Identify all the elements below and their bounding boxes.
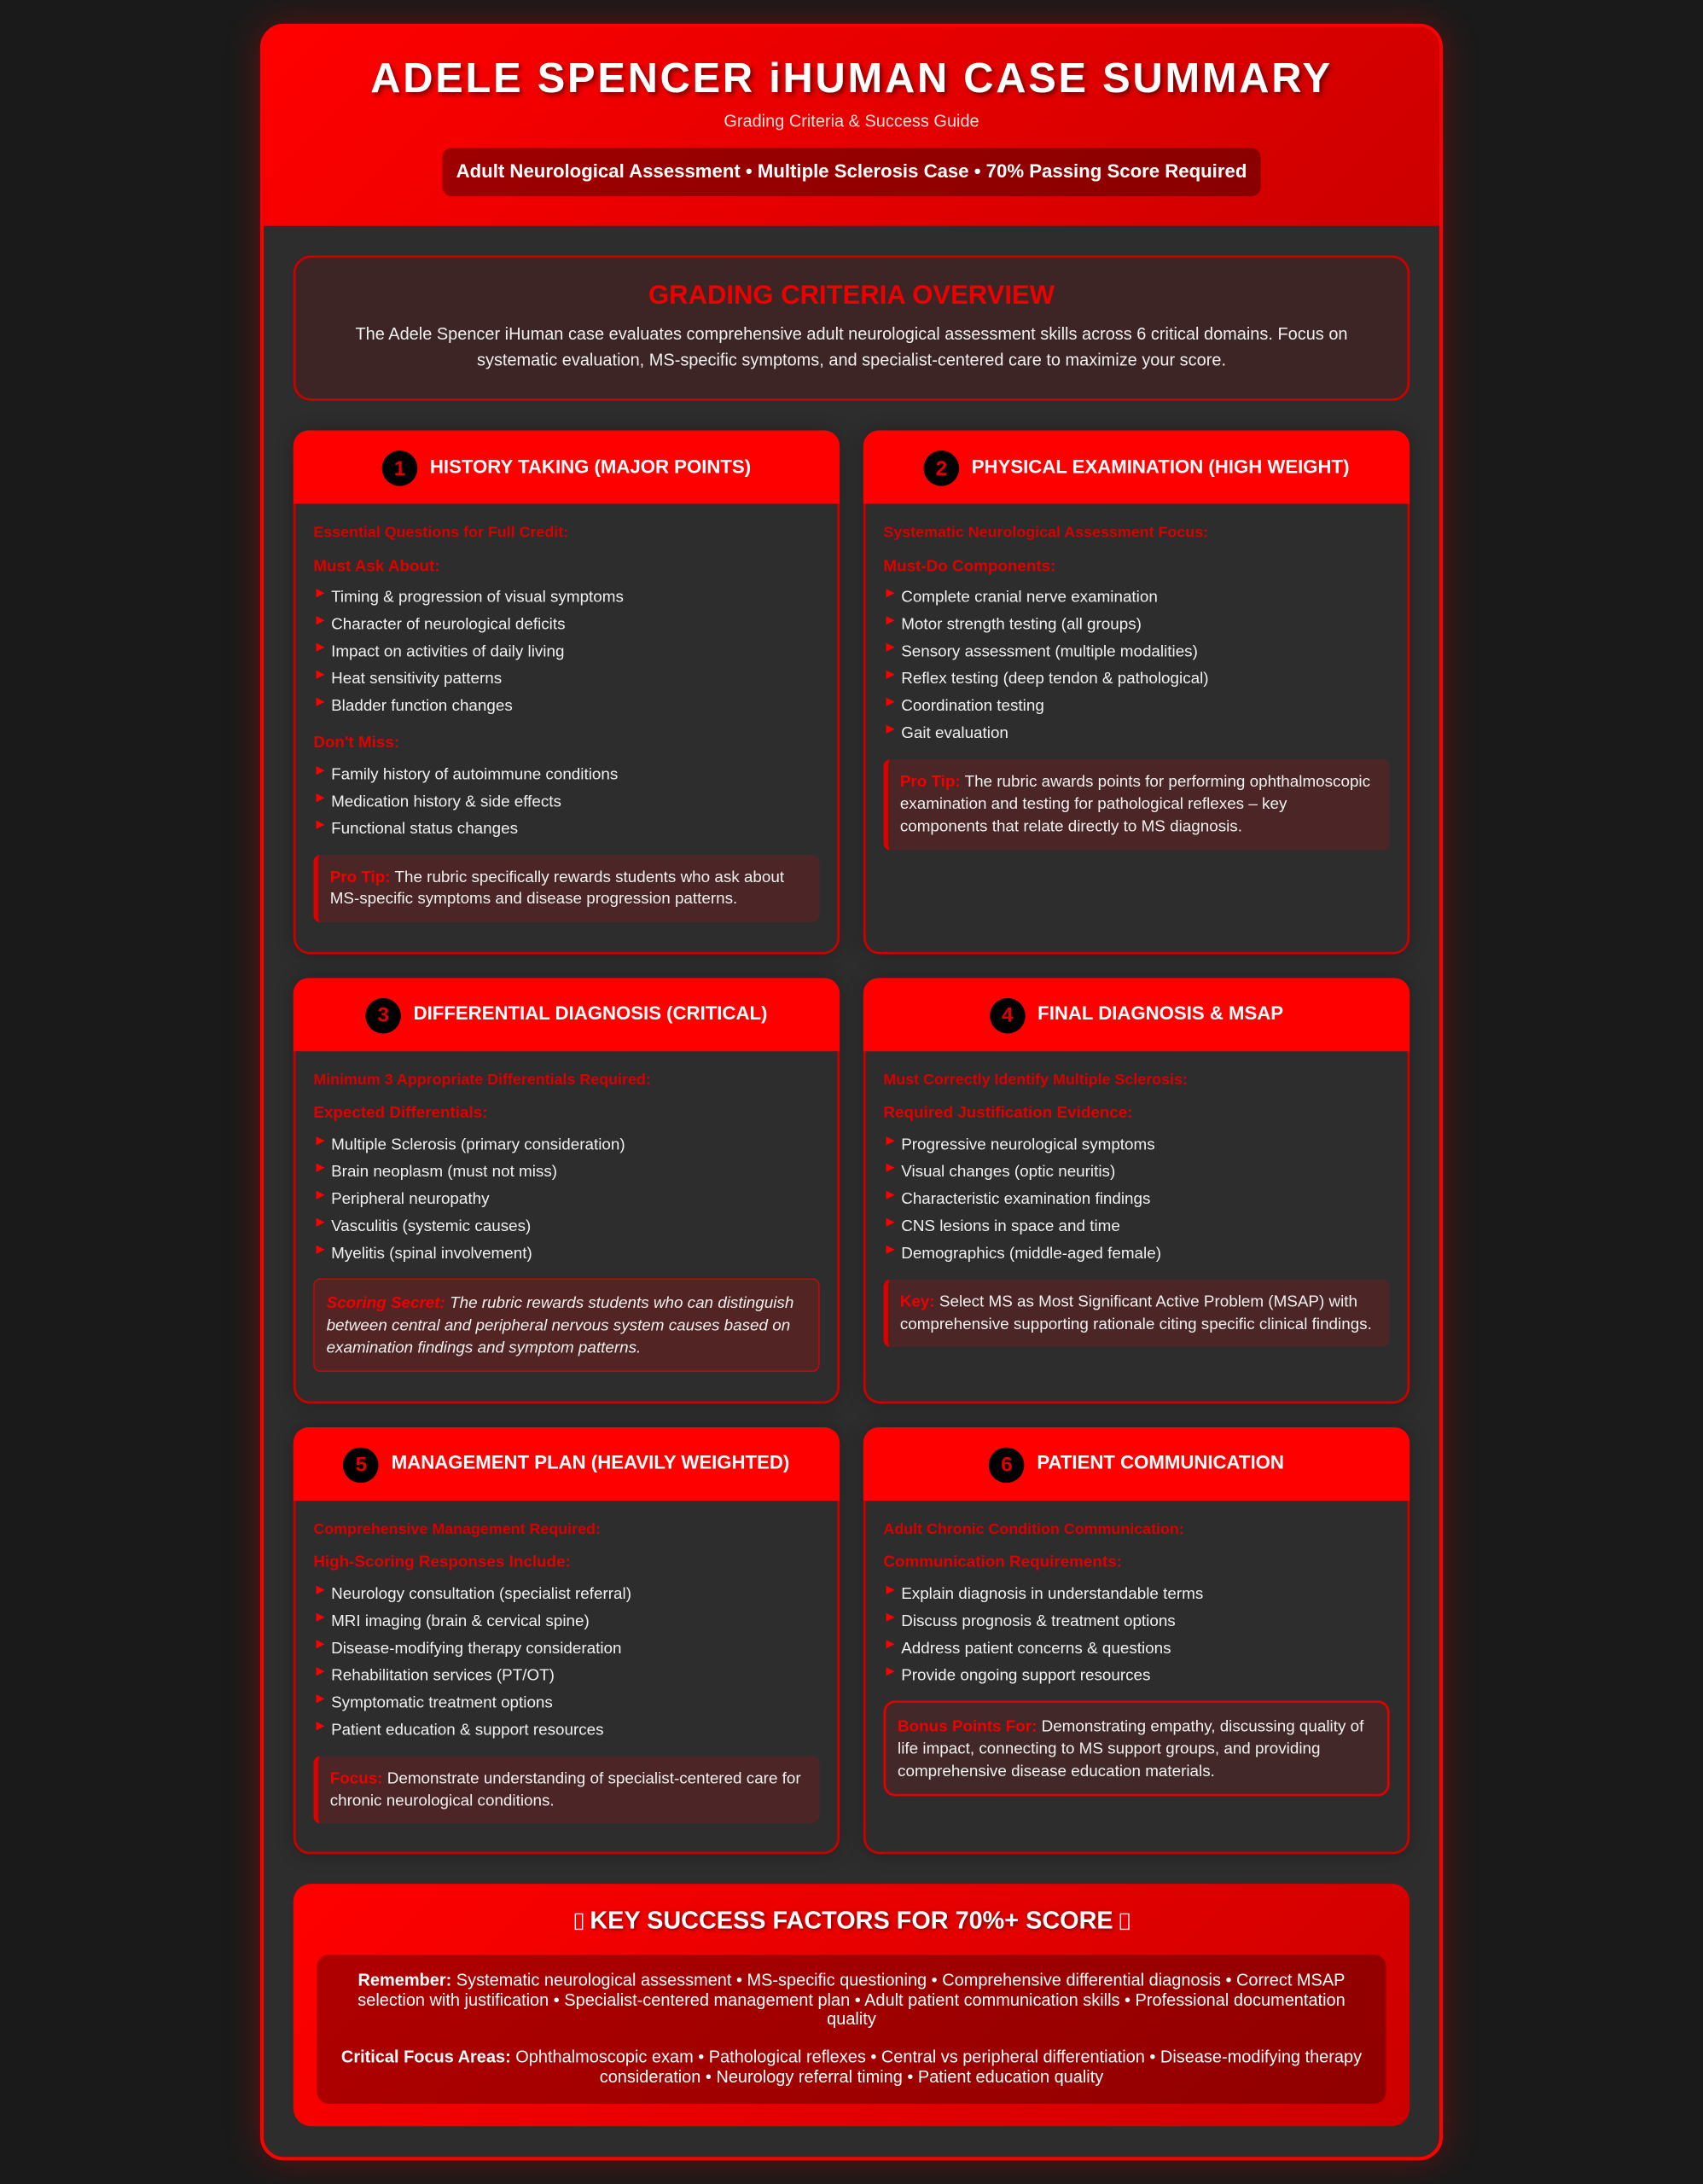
sub heading: Required Justification Evidence: [883,1103,1133,1121]
checklist: Multiple Sclerosis (primary consideration) [331,1135,625,1153]
checklist: Vasculitis (systemic causes) [331,1217,531,1234]
checklist: Disease-modifying therapy consideration [331,1639,622,1656]
case info badge: Adult Neurological Assessment • Multiple Sclerosis Case • 70% Passing Score Required [456,162,1247,182]
success details: Remember: Systematic neurological assessment • MS-specific questioning • Comprehensive differential diagnosis • Correct MSAP selection with justification • Specialist-centered management plan • Adult patient communication skills • Professional documentation quality [357,1972,1346,2029]
checklist: Patient education & support resources [331,1720,604,1738]
section title: Must Correctly Identify Multiple Sclerosis: [883,1070,1188,1088]
callout: pro tip: Pro Tip: The rubric specifically rewards students who ask about MS-specific symptoms and disease progression patterns. [330,868,784,908]
checklist: Provide ongoing support resources [901,1665,1150,1683]
card heading 5: 5 [356,1452,367,1476]
checklist [886,1584,1203,1684]
callout: bonus points: Bonus Points For: Demonstrating empathy, discussing quality of life impact, connecting to MS support groups, and providing comprehensive disease education materials. [898,1717,1363,1780]
checklist [316,764,618,837]
callout: scoring secret [313,1279,820,1372]
checklist: CNS lesions in space and time [901,1217,1120,1234]
card heading 4 [863,978,1409,1051]
card heading 1: 1 [394,456,405,479]
sub heading: High-Scoring Responses Include: [313,1553,571,1571]
checklist: Impact on activities of daily living [331,642,564,659]
checklist: Bladder function changes [331,696,513,714]
checklist: Family history of autoimmune conditions [331,764,618,782]
checklist: Timing & progression of visual symptoms [331,588,624,606]
panel: grading criteria overview [294,255,1409,401]
card body 3 [313,1070,820,1372]
infographic container [260,24,1443,2160]
card heading 6 [863,1426,1409,1500]
checklist: Brain neoplasm (must not miss) [331,1162,557,1180]
card heading 5 [294,1426,840,1500]
checklist: Rehabilitation services (PT/OT) [331,1665,555,1683]
callout: pro tip: Pro Tip: The rubric awards points for performing ophthalmoscopic examination and testing for pathological reflexes – key components that relate directly to MS diagnosis. [900,772,1370,834]
panel: final diagnosis [863,978,1409,1403]
sub heading: Expected Differentials: [313,1103,488,1121]
card body 4 [883,1070,1390,1347]
checklist: Symptomatic treatment options [331,1693,553,1711]
checklist: Complete cranial nerve examination [901,588,1158,606]
panel: differential diagnosis [294,978,840,1403]
sub heading: Must Ask About: [313,556,440,574]
card heading 1 [294,431,840,503]
checklist [316,1135,625,1262]
card heading 1: HISTORY TAKING (MAJOR POINTS) [430,457,751,477]
checklist: Explain diagnosis in understandable terms [901,1584,1203,1602]
card heading 4: 4 [1002,1003,1014,1026]
section title: Essential Questions for Full Credit: [313,523,568,540]
checklist: Character of neurological deficits [331,615,566,633]
checklist: Motor strength testing (all groups) [901,615,1142,633]
success heading: KEY SUCCESS FACTORS FOR 70%+ SCORE [590,1908,1113,1935]
callout: key: Key: Select MS as Most Significant Active Problem (MSAP) with comprehensive supporting rationale citing specific clinical findings. [900,1292,1372,1332]
panel: physical examination [863,431,1409,954]
checklist: Functional status changes [331,819,518,837]
card heading 2 [863,431,1409,503]
checklist: Peripheral neuropathy [331,1189,490,1207]
case info badge [442,148,1261,197]
panel: key success factors [294,1884,1409,2126]
overview heading: GRADING CRITERIA OVERVIEW [648,281,1055,310]
callout: focus: Focus: Demonstrate understanding of specialist-centered care for chronic neurological conditions. [330,1769,801,1809]
sub heading: Don't Miss: [313,733,399,751]
card heading 3: DIFFERENTIAL DIAGNOSIS (CRITICAL) [414,1004,767,1025]
checklist: Sensory assessment (multiple modalities) [901,642,1198,659]
checklist: Medication history & side effects [331,792,561,810]
success details: Critical Focus Areas: Ophthalmoscopic exam • Pathological reflexes • Central vs peripheral differentiation • Disease-modifying therapy consideration • Neurology referral timing • Patient education quality [341,2048,1362,2087]
card body 5 [313,1519,819,1824]
checklist: Characteristic examination findings [901,1189,1150,1207]
card heading 2: PHYSICAL EXAMINATION (HIGH WEIGHT) [972,457,1349,477]
checklist: Progressive neurological symptoms [901,1135,1155,1153]
card heading 3: 3 [377,1003,389,1026]
card body 1 [313,523,819,922]
card heading 5: MANAGEMENT PLAN (HEAVILY WEIGHTED) [392,1454,789,1473]
checklist: Discuss prognosis & treatment options [901,1612,1176,1629]
card body 6 [883,1519,1390,1797]
sub heading: Must-Do Components: [883,556,1055,574]
card heading 6: 6 [1001,1452,1013,1476]
section title: Adult Chronic Condition Communication: [883,1519,1184,1536]
section title: Systematic Neurological Assessment Focus: [883,523,1208,540]
checklist [316,588,624,714]
callout: focus [313,1756,820,1824]
checklist: Neurology consultation (specialist referral) [331,1584,631,1602]
panel: patient communication [863,1426,1409,1854]
panel: history taking [294,431,840,954]
header banner [264,27,1439,226]
checklist: Address patient concerns & questions [901,1639,1171,1656]
callout: pro tip [883,759,1390,850]
callout: pro tip [313,854,820,923]
callout: key [883,1279,1390,1347]
checklist: Heat sensitivity patterns [331,670,502,687]
callout: bonus points [883,1700,1390,1796]
section title: Minimum 3 Appropriate Differentials Required: [313,1070,651,1088]
criteria cards grid [294,430,1409,1855]
panel: management plan [294,1426,840,1854]
callout: scoring secret: Scoring Secret: The rubric rewards students who can distinguish between central and peripheral nervous system causes based on examination findings and symptom patterns. [327,1294,793,1356]
checklist: Reflex testing (deep tendon & pathological) [901,670,1209,687]
sub heading: Communication Requirements: [883,1553,1122,1571]
card heading 2: 2 [936,456,947,479]
subtitle: Grading Criteria & Success Guide [724,113,979,131]
card heading 3 [294,978,840,1051]
checklist: Visual changes (optic neuritis) [901,1162,1115,1180]
title: ADELE SPENCER iHUMAN CASE SUMMARY [370,55,1333,102]
main content [294,255,1409,2126]
card body 2 [883,523,1390,850]
checklist: Demographics (middle-aged female) [901,1244,1161,1261]
card heading 4: FINAL DIAGNOSIS & MSAP [1037,1004,1283,1025]
card heading 6: PATIENT COMMUNICATION [1037,1454,1284,1473]
checklist: Gait evaluation [901,723,1008,741]
success details [317,1955,1386,2104]
checklist: MRI imaging (brain & cervical spine) [331,1612,590,1629]
checklist [316,1584,631,1739]
checklist: Coordination testing [901,696,1044,714]
section title: Comprehensive Management Required: [313,1519,601,1536]
checklist: Myelitis (spinal involvement) [331,1244,532,1261]
overview text: The Adele Spencer iHuman case evaluates comprehensive adult neurological assessment skills across 6 critical domains. Focus on systematic evaluation, MS-specific symptoms, and specialist-centered care to maximize your score. [355,325,1348,370]
checklist [886,588,1209,741]
checklist [886,1135,1161,1262]
